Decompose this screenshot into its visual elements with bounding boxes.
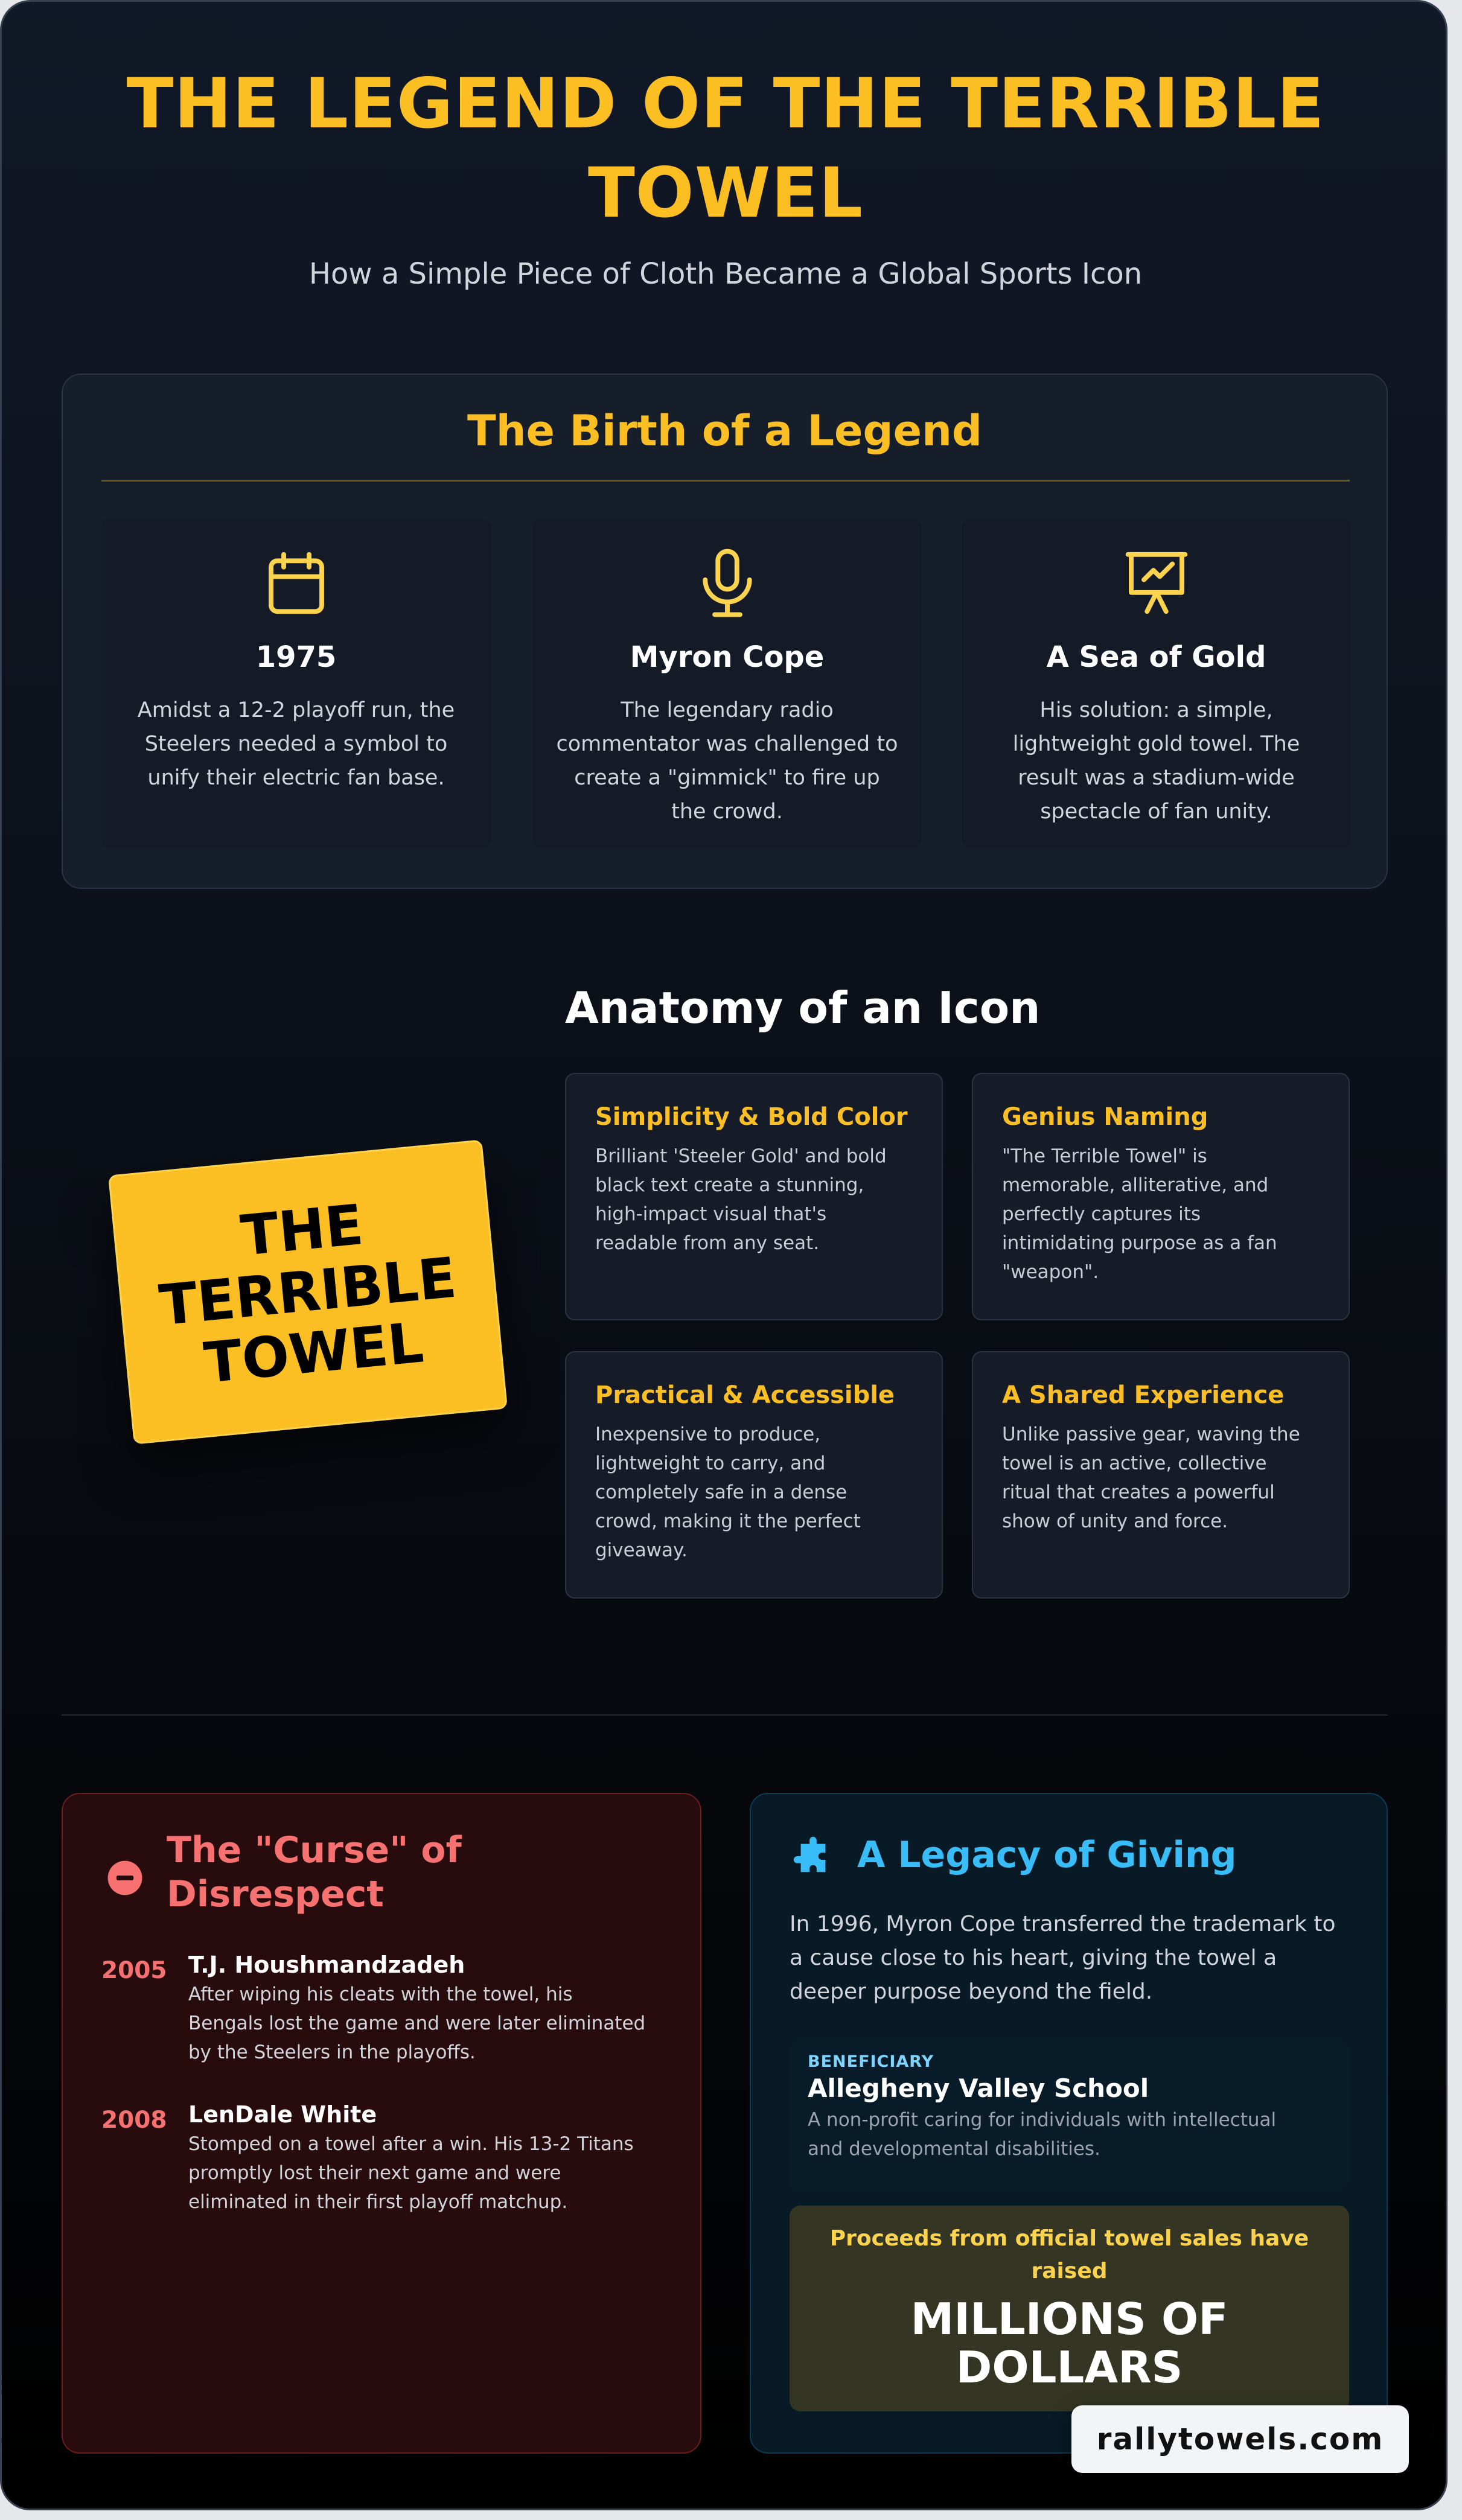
badge: rallytowels.com: rallytowels.com — [1097, 2422, 1384, 2457]
towel graphic: TERRIBLE — [156, 1246, 459, 1338]
beneficiary box: Allegheny Valley School — [808, 2073, 1149, 2103]
text: legacy intro: a cause close to his heart, giving the towel a — [790, 1946, 1277, 1970]
subtitle: How a Simple Piece of Cloth Became a Global Sports Icon — [309, 257, 1142, 291]
entry: 2005: After wiping his cleats with the towel, his — [188, 1984, 573, 2005]
feature: simplicity: readable from any seat. — [595, 1232, 819, 1254]
card: myron cope: create a "gimmick" to fire up — [574, 766, 880, 790]
feature: simplicity: Brilliant 'Steeler Gold' and bold — [595, 1145, 887, 1167]
proceeds box: raised — [1031, 2259, 1107, 2283]
entry: 2008 — [101, 2101, 634, 2213]
feature: simplicity: black text create a stunning, — [595, 1174, 864, 1196]
card: myron cope: commentator was challenged to — [556, 732, 898, 756]
card: sea of gold: His solution: a simple, — [1039, 698, 1273, 722]
card: 1975: unify their electric fan base. — [147, 766, 445, 790]
entry: 2008: promptly lost their next game and were — [188, 2162, 561, 2184]
entry: 2008: LenDale White — [188, 2101, 377, 2128]
feature: practical: crowd, making it the perfect — [595, 1510, 861, 1532]
feature: practical: Inexpensive to produce, — [595, 1424, 820, 1445]
proceeds box: MILLIONS OF — [911, 2294, 1228, 2344]
feature: shared: show of unity and force. — [1002, 1510, 1228, 1532]
feature: shared — [972, 1351, 1350, 1599]
feature: simplicity — [565, 1073, 943, 1320]
entry: 2005: Bengals lost the game and were later eliminated — [188, 2012, 645, 2034]
feature: shared: ritual that creates a powerful — [1002, 1481, 1275, 1503]
feature: naming: perfectly captures its — [1002, 1203, 1201, 1225]
icon: calendar — [269, 552, 324, 614]
card: 1975: 1975 — [256, 640, 336, 674]
card: sea of gold: result was a stadium-wide — [1018, 766, 1295, 790]
feature: practical: Practical & Accessible — [595, 1381, 895, 1409]
feature: shared: Unlike passive gear, waving the — [1002, 1424, 1300, 1445]
icon: minus circle — [107, 1861, 142, 1895]
heading: legacy: A Legacy of Giving — [857, 1834, 1237, 1876]
proceeds box: Proceeds from official towel sales have — [830, 2226, 1309, 2251]
feature: naming — [972, 1073, 1350, 1320]
title — [127, 63, 1324, 233]
panel: birth of a legend — [62, 374, 1388, 889]
entry: 2008: eliminated in their first playoff matchup. — [188, 2191, 567, 2213]
card: myron cope: The legendary radio — [621, 698, 834, 722]
title: THE LEGEND OF THE TERRIBLE — [127, 63, 1324, 144]
beneficiary box — [790, 2040, 1349, 2191]
heading: curse — [167, 1829, 462, 1915]
panel: curse — [62, 1793, 701, 2454]
card: sea of gold: lightweight gold towel. The — [1013, 732, 1300, 756]
feature: practical: lightweight to carry, and — [595, 1452, 825, 1474]
panel: legacy — [750, 1793, 1388, 2454]
beneficiary box: BENEFICIARY — [808, 2052, 934, 2071]
towel graphic: TOWEL — [201, 1310, 426, 1396]
entry: 2008: 2008 — [101, 2107, 167, 2134]
text: legacy intro — [790, 1912, 1335, 2004]
heading: birth: The Birth of a Legend — [467, 406, 982, 456]
card: 1975: Amidst a 12-2 playoff run, the — [138, 698, 455, 722]
feature: simplicity: Simplicity & Bold Color — [595, 1103, 908, 1131]
card: myron cope: Myron Cope — [630, 640, 824, 674]
proceeds box — [790, 2206, 1349, 2411]
card: myron cope — [532, 518, 922, 848]
badge: rallytowels.com — [1071, 2405, 1409, 2473]
title: TOWEL — [588, 153, 863, 233]
card: 1975 — [101, 518, 491, 848]
beneficiary box: A non-profit caring for individuals with intellectual — [808, 2109, 1276, 2131]
feature: shared: towel is an active, collective — [1002, 1452, 1267, 1474]
entry: 2008: Stomped on a towel after a win. His 13-2 Titans — [188, 2133, 634, 2155]
text: legacy intro: In 1996, Myron Cope transferred the trademark to — [790, 1912, 1335, 1936]
card: myron cope: the crowd. — [671, 800, 783, 824]
icon: presentation chart — [1125, 552, 1188, 614]
feature: naming: intimidating purpose as a fan — [1002, 1232, 1277, 1254]
towel graphic: THE — [238, 1192, 366, 1268]
towel graphic — [108, 1139, 508, 1445]
entry: 2005: T.J. Houshmandzadeh — [188, 1952, 465, 1978]
entry: 2005: 2005 — [101, 1957, 167, 1984]
card: sea of gold: spectacle of fan unity. — [1040, 800, 1272, 824]
icon: puzzle — [793, 1837, 826, 1872]
text: legacy intro: deeper purpose beyond the field. — [790, 1979, 1152, 2004]
feature: practical: giveaway. — [595, 1539, 688, 1561]
feature: naming: "The Terrible Towel" is — [1002, 1145, 1207, 1167]
feature: naming: "weapon". — [1002, 1261, 1099, 1283]
heading: curse: Disrespect — [167, 1873, 384, 1915]
card: 1975: Steelers needed a symbol to — [145, 732, 447, 756]
heading: anatomy: Anatomy of an Icon — [565, 982, 1040, 1033]
icon: microphone — [703, 549, 752, 617]
feature: naming: Genius Naming — [1002, 1103, 1208, 1131]
heading: curse: The "Curse" of — [167, 1829, 462, 1871]
feature: practical: completely safe in a dense — [595, 1481, 847, 1503]
feature: simplicity: high-impact visual that's — [595, 1203, 826, 1225]
feature: practical — [565, 1351, 943, 1599]
card: sea of gold: A Sea of Gold — [1047, 640, 1266, 674]
entry: 2005 — [101, 1952, 645, 2063]
card: sea of gold — [962, 518, 1351, 848]
entry: 2005: by the Steelers in the playoffs. — [188, 2041, 476, 2063]
feature: naming: memorable, alliterative, and — [1002, 1174, 1268, 1196]
proceeds box: DOLLARS — [956, 2342, 1183, 2393]
feature: shared: A Shared Experience — [1002, 1381, 1284, 1409]
beneficiary box: and developmental disabilities. — [808, 2138, 1100, 2160]
